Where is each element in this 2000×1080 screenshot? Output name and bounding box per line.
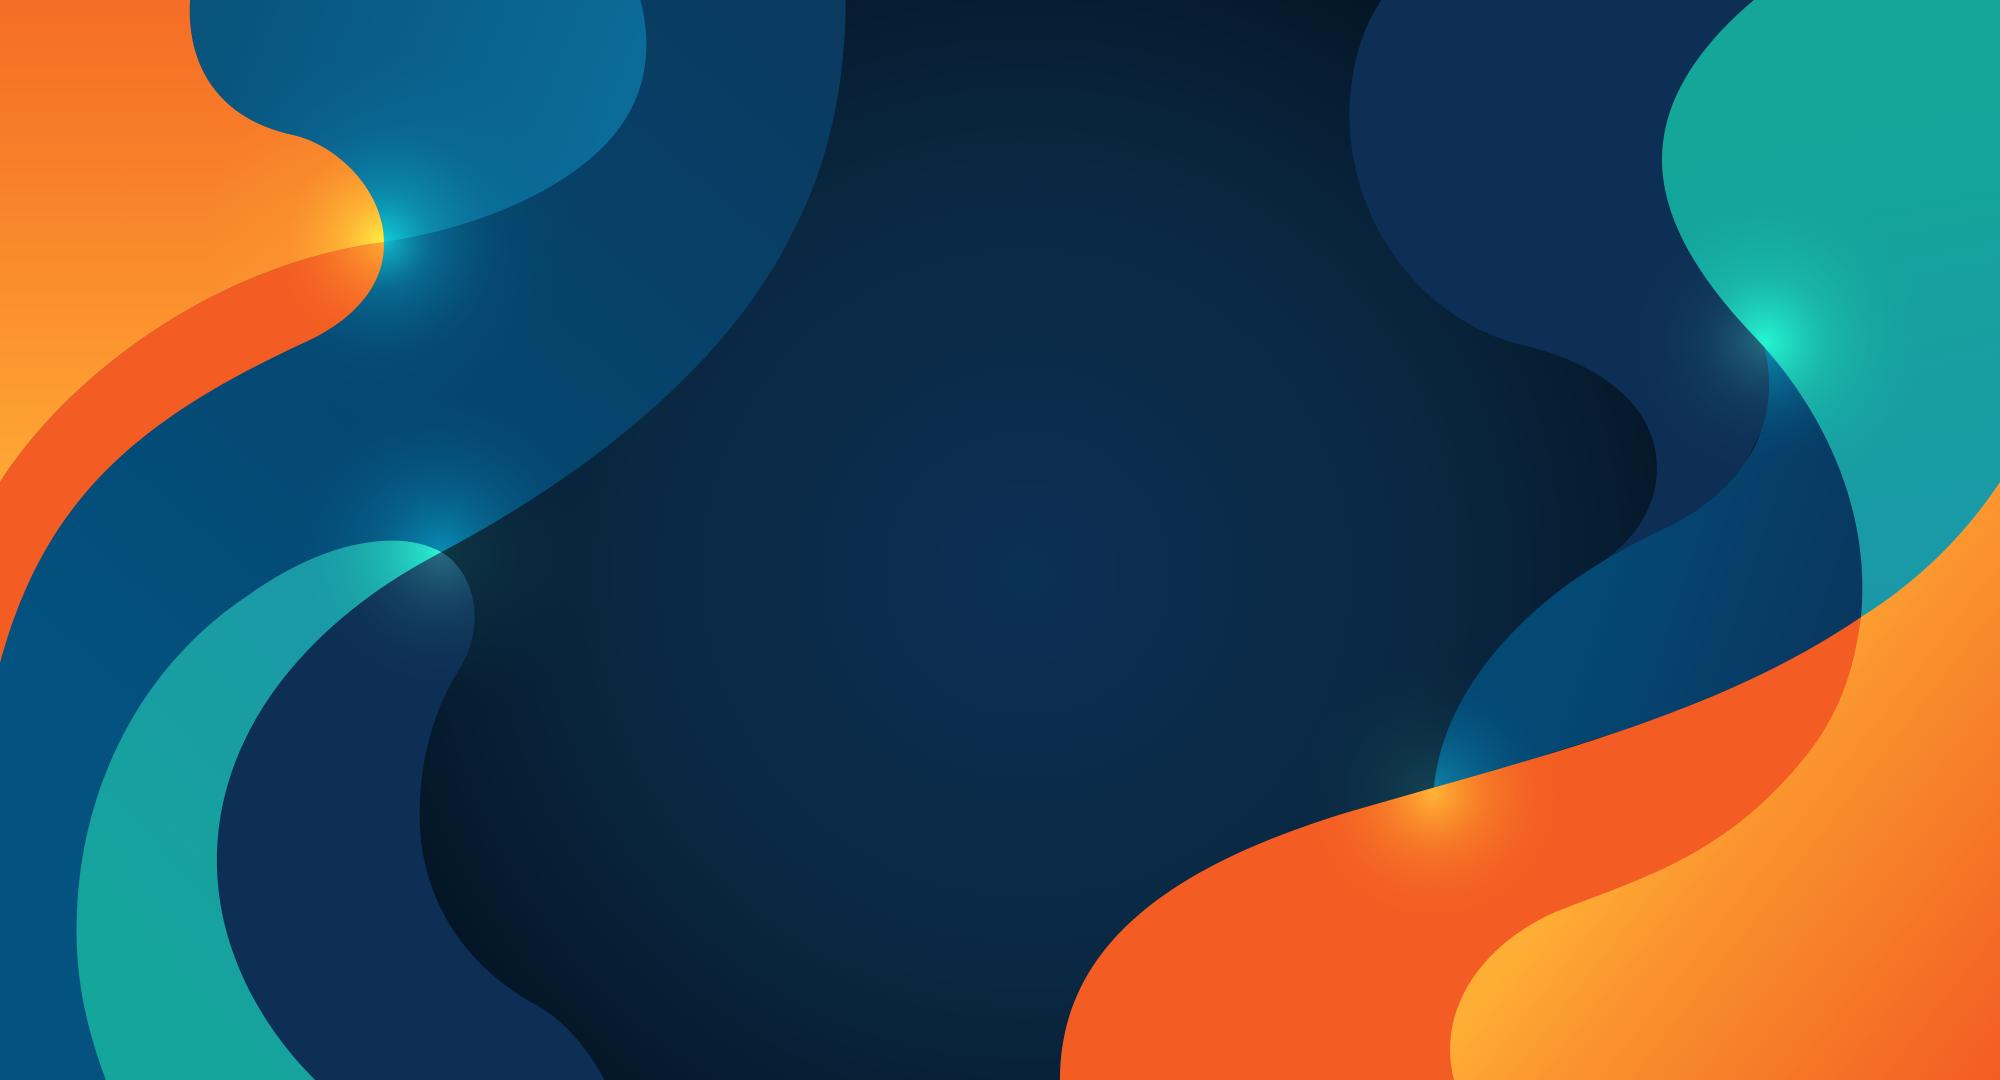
glows on dark background (276, 386, 1574, 933)
top-left orange shape (0, 0, 384, 482)
top-right teal shape (1662, 0, 2000, 638)
top light blue lobe (190, 0, 646, 242)
bottom-left teal shape (77, 541, 441, 1080)
bottom-right orange shape (1450, 482, 2000, 1080)
large blue wave (0, 0, 846, 1080)
bottom-left navy shape (153, 552, 605, 1080)
bottom red-orange wave (1060, 617, 1913, 1080)
top-left red-orange band (0, 242, 384, 663)
right navy shape (1349, 0, 1786, 561)
right blue shape (1434, 347, 1913, 791)
